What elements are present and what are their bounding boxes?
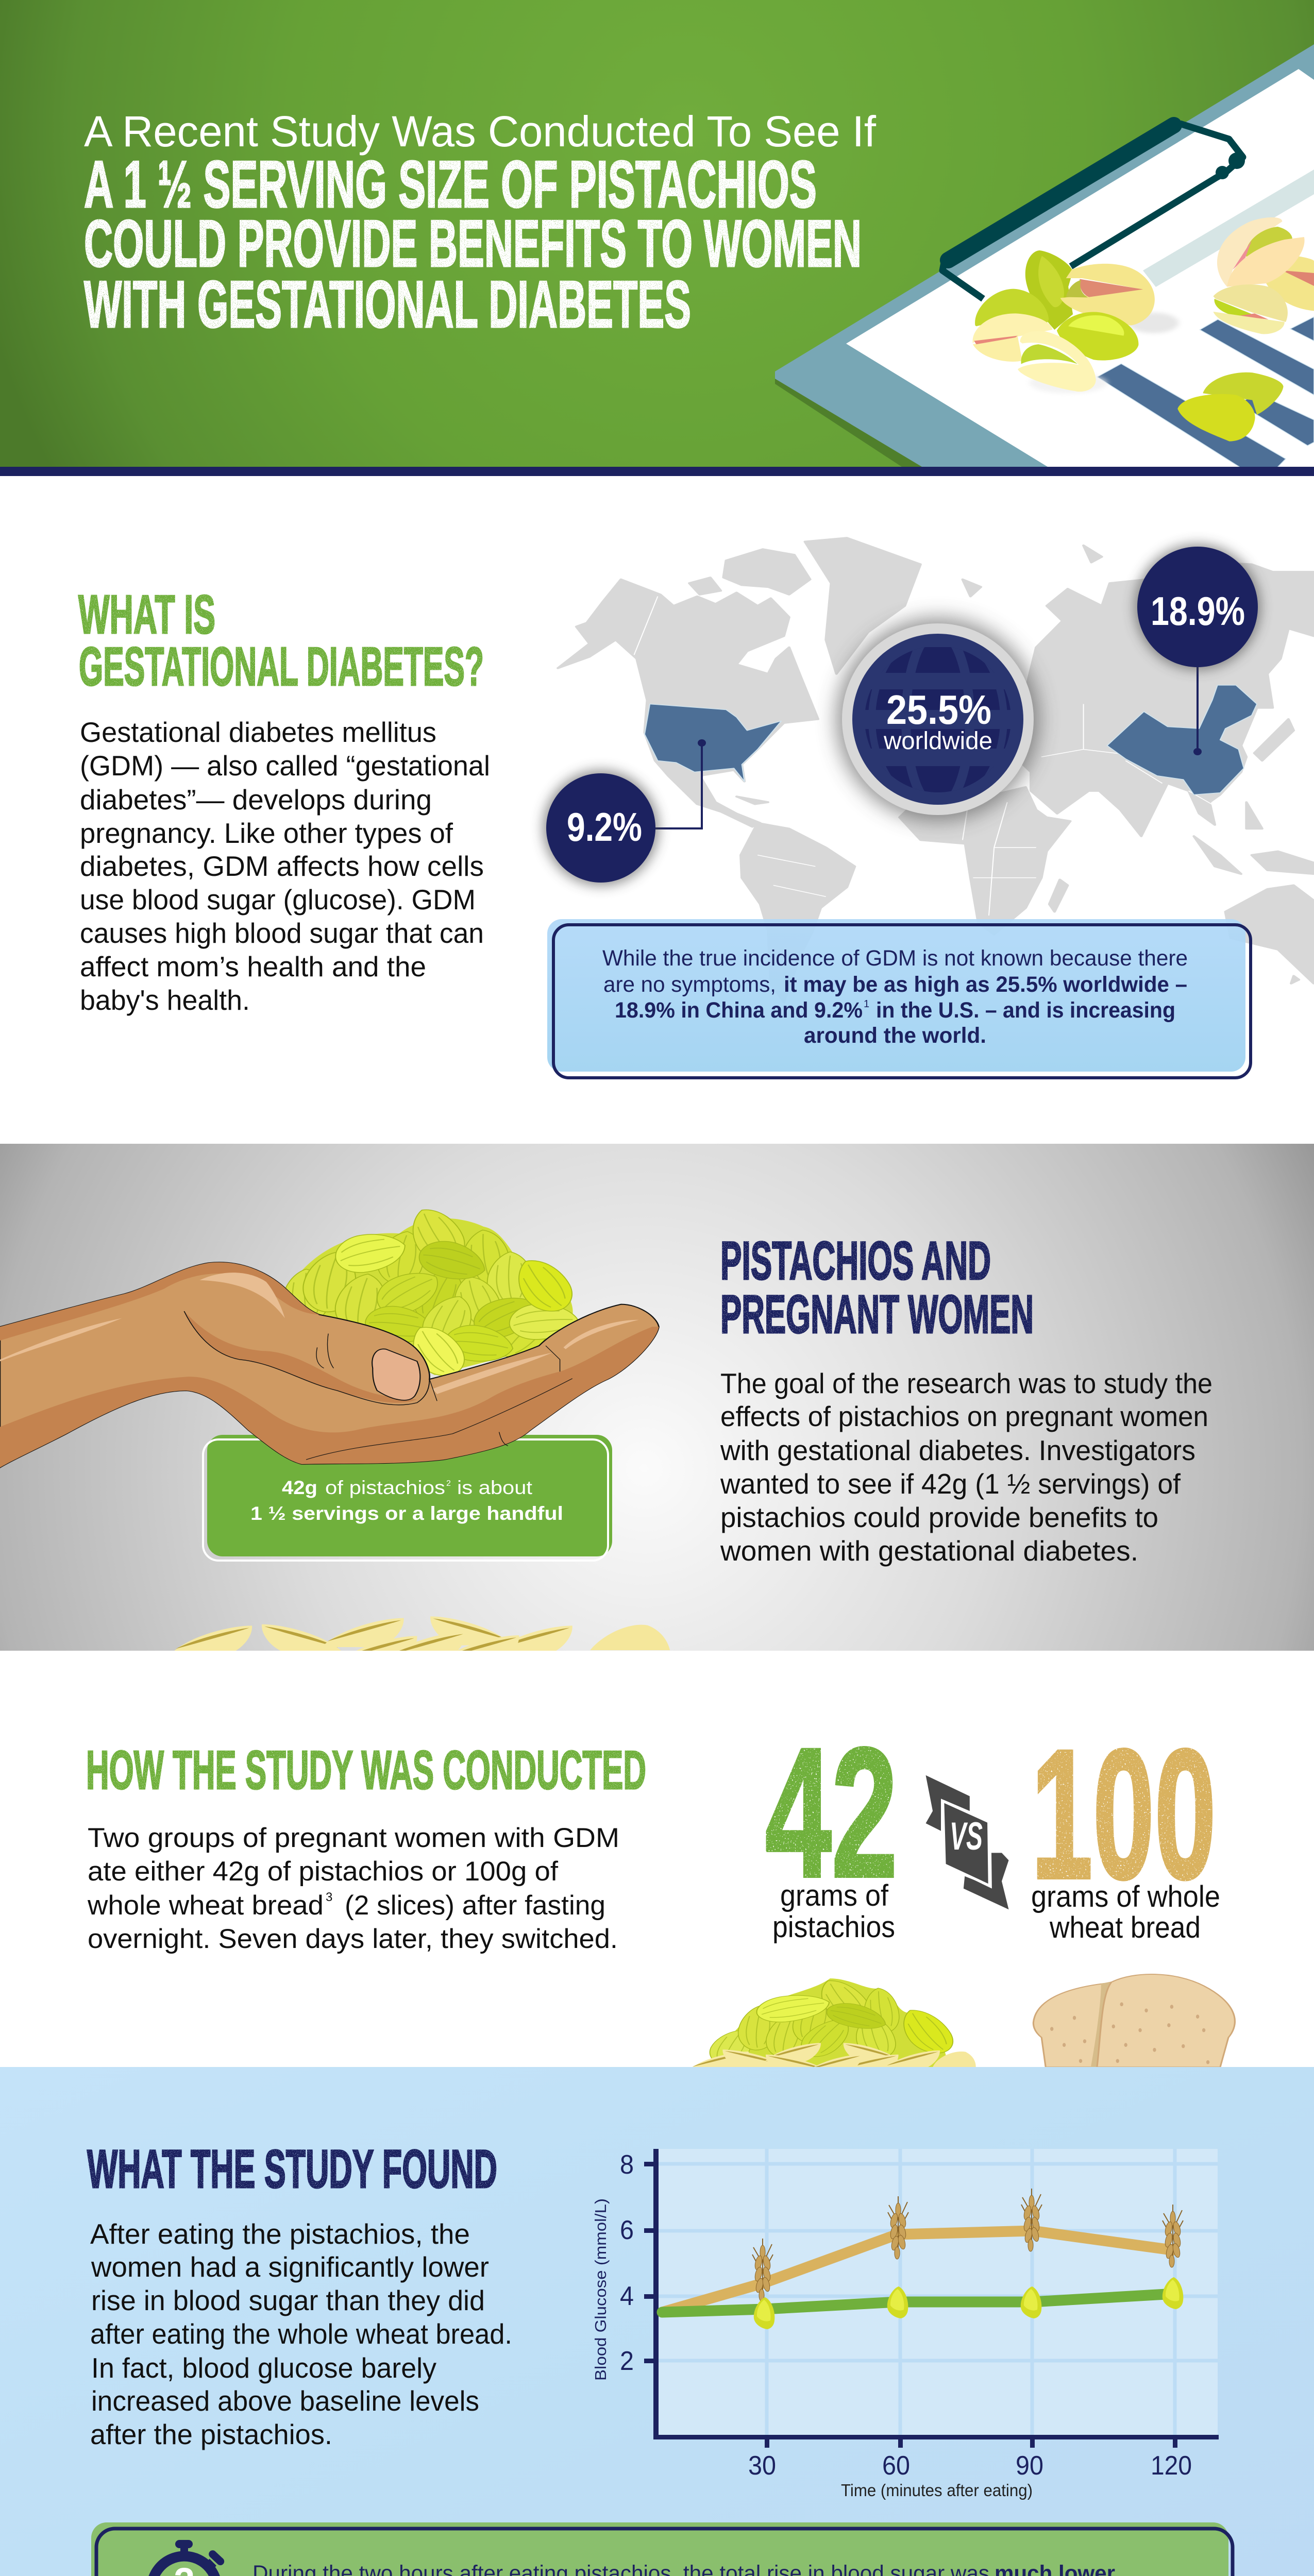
body text: women with gestational diabetes.	[720, 1535, 1138, 1567]
heading: WHAT THE STUDY FOUND	[87, 2139, 497, 2199]
illustration: clipboard with pistachios	[775, 44, 1314, 467]
stat: 42 grams of pistachios: pistachios	[772, 1910, 895, 1944]
title intro line: A Recent Study Was Conducted To See If	[84, 107, 877, 156]
callout: incidence: it may be as high as 25.5% worldwide –	[784, 972, 1187, 997]
callout: incidence: 1	[864, 998, 869, 1010]
stat: 9.2% usa: 9.2%	[567, 804, 642, 850]
body text: (2 slices) after fasting	[345, 1890, 605, 1921]
stat: 25.5% worldwide	[837, 618, 1039, 820]
y axis labels: 2	[620, 2346, 634, 2376]
body text: use blood sugar (glucose). GDM	[80, 884, 476, 916]
label text: 42g: 42g	[282, 1477, 317, 1498]
label text: 42g	[250, 1477, 563, 1524]
title headline: WITH GESTATIONAL DIABETES	[84, 267, 691, 342]
body text: diabetes, GDM affects how cells	[80, 850, 484, 882]
cover below section	[0, 1651, 1314, 1713]
stat: 9.2% usa	[543, 770, 659, 886]
callout: incidence: around the world.	[804, 1023, 986, 1048]
shells row	[172, 1616, 670, 1665]
body text: The goal of the research was to study the	[720, 1367, 1212, 1399]
callout: two hours	[91, 2522, 1233, 2576]
stat: 18.9% china	[1135, 544, 1260, 670]
stat: 18.9% china: 18.9%	[1151, 588, 1245, 634]
plot area	[658, 2149, 1218, 2435]
line: pistachios	[662, 2294, 1175, 2312]
callout: incidence: 18.9% in China and 9.2%	[615, 998, 863, 1023]
header background	[0, 0, 1314, 467]
icon: vs ribbon	[926, 1775, 1009, 1909]
heading	[720, 1231, 1034, 1345]
stat: 100 grams of whole wheat bread: wheat bread	[1049, 1911, 1201, 1944]
stat: 100 grams of whole wheat bread: grams of whole	[1031, 1880, 1220, 1913]
x axis labels	[748, 2451, 1192, 2481]
stat: 100 grams of whole wheat bread	[1031, 1711, 1220, 1944]
markers: wheat	[752, 2189, 1183, 2301]
body text: affect mom’s health and the	[80, 951, 426, 982]
heading: WHAT IS	[78, 584, 215, 645]
body text: Gestational diabetes mellitus	[80, 716, 436, 748]
illustration: bread slices	[1033, 1974, 1235, 2067]
world map	[558, 538, 1313, 1003]
body text	[90, 2218, 512, 2450]
illustration: hand holding pistachios	[0, 1202, 659, 1468]
y axis title: Blood Glucose (mmol/L)	[592, 2198, 610, 2381]
label text: 42g: 2	[446, 1479, 451, 1488]
heading: PREGNANT WOMEN	[720, 1284, 1034, 1345]
body text: women had a significantly lower	[91, 2251, 489, 2283]
body text: ate either 42g of pistachios or 100g of	[88, 1856, 558, 1887]
body text: with gestational diabetes. Investigators	[720, 1434, 1195, 1466]
icon: stopwatch	[151, 2540, 225, 2576]
usa highlight	[645, 704, 781, 782]
connector: china	[1193, 665, 1202, 755]
y axis labels: 8	[620, 2150, 634, 2180]
panel: what is gestational diabetes	[78, 538, 1313, 1078]
callout: incidence	[547, 919, 1251, 1078]
header bottom rule	[0, 467, 1314, 476]
label text: 42g: is about	[457, 1477, 533, 1498]
y axis labels: 4	[620, 2281, 634, 2311]
icon: vs ribbon: VS	[950, 1815, 983, 1858]
body text: after eating the whole wheat bread.	[90, 2318, 512, 2350]
title headline	[84, 147, 862, 342]
axes	[644, 2149, 1219, 2448]
callout: incidence: While the true incidence of GDM is not known because there	[602, 946, 1188, 971]
body text	[87, 1823, 619, 1954]
stat: 42 grams of pistachios: grams of	[780, 1879, 889, 1912]
heading: PISTACHIOS AND	[720, 1231, 991, 1291]
x axis labels: 30	[748, 2451, 776, 2481]
body text: whole wheat bread	[87, 1890, 324, 1921]
markers: pistachios	[754, 2277, 1183, 2329]
title headline: A 1 ½ SERVING SIZE OF PISTACHIOS	[84, 147, 817, 222]
line: whole wheat bread	[662, 2231, 1175, 2312]
blue background	[0, 2067, 1314, 2576]
callout: incidence: in the U.S. – and is increasing	[876, 998, 1175, 1023]
panel: header banner	[0, 0, 1314, 467]
label text: 42g: of pistachios	[325, 1477, 445, 1498]
body text: After eating the pistachios, the	[90, 2218, 470, 2250]
body text: pistachios could provide benefits to	[720, 1501, 1158, 1533]
stat: 25.5% worldwide: worldwide	[883, 727, 992, 755]
y axis labels: 6	[620, 2215, 634, 2245]
connector: usa	[654, 739, 706, 828]
body text	[80, 716, 490, 1016]
body text: after the pistachios.	[90, 2418, 332, 2450]
body text: Two groups of pregnant women with GDM	[88, 1823, 619, 1853]
body text: (GDM) — also called “gestational	[80, 750, 490, 782]
stat: 25.5% worldwide: 25.5%	[886, 687, 991, 733]
x axis title: Time (minutes after eating)	[841, 2481, 1033, 2500]
heading: GESTATIONAL DIABETES?	[79, 636, 484, 697]
body text: rise in blood sugar than they did	[91, 2284, 485, 2316]
callout: incidence: are no symptoms,	[603, 972, 776, 997]
x axis labels: 120	[1151, 2451, 1192, 2481]
body text	[720, 1367, 1212, 1567]
heading	[78, 584, 484, 697]
x axis labels: 90	[1016, 2451, 1043, 2481]
body text: overnight. Seven days later, they switched.	[88, 1924, 618, 1954]
gray background	[0, 1144, 1314, 1651]
label: 42g callout box	[203, 1435, 612, 1561]
body text: pregnancy. Like other types of	[80, 817, 453, 849]
y axis labels	[620, 2150, 634, 2376]
chart: blood glucose	[592, 2149, 1219, 2500]
body text: 3	[326, 1890, 332, 1904]
illustration: pistachio pile	[689, 1975, 976, 2074]
body text: effects of pistachios on pregnant women	[720, 1400, 1208, 1432]
panel: pistachios and pregnant women	[0, 1144, 1314, 1713]
china highlight	[1107, 685, 1257, 794]
heading: HOW THE STUDY WAS CONDUCTED	[86, 1740, 646, 1801]
body text: causes high blood sugar that can	[80, 917, 484, 949]
body text: baby's health.	[80, 984, 250, 1016]
x axis labels: 60	[882, 2451, 910, 2481]
stat: 42 grams of pistachios	[765, 1709, 898, 1944]
body text: wanted to see if 42g (1 ½ servings) of	[720, 1468, 1181, 1500]
panel: what the study found	[0, 2067, 1314, 2576]
stat: 42 grams of pistachios: 42	[765, 1709, 898, 1916]
label text: 42g: 1 ½ servings or a large handful	[250, 1503, 563, 1524]
body text: diabetes”— develops during	[80, 784, 432, 816]
body text: In fact, blood glucose barely	[91, 2352, 436, 2384]
body text: increased above baseline levels	[91, 2385, 479, 2417]
panel: how the study was conducted	[86, 1709, 1235, 2074]
